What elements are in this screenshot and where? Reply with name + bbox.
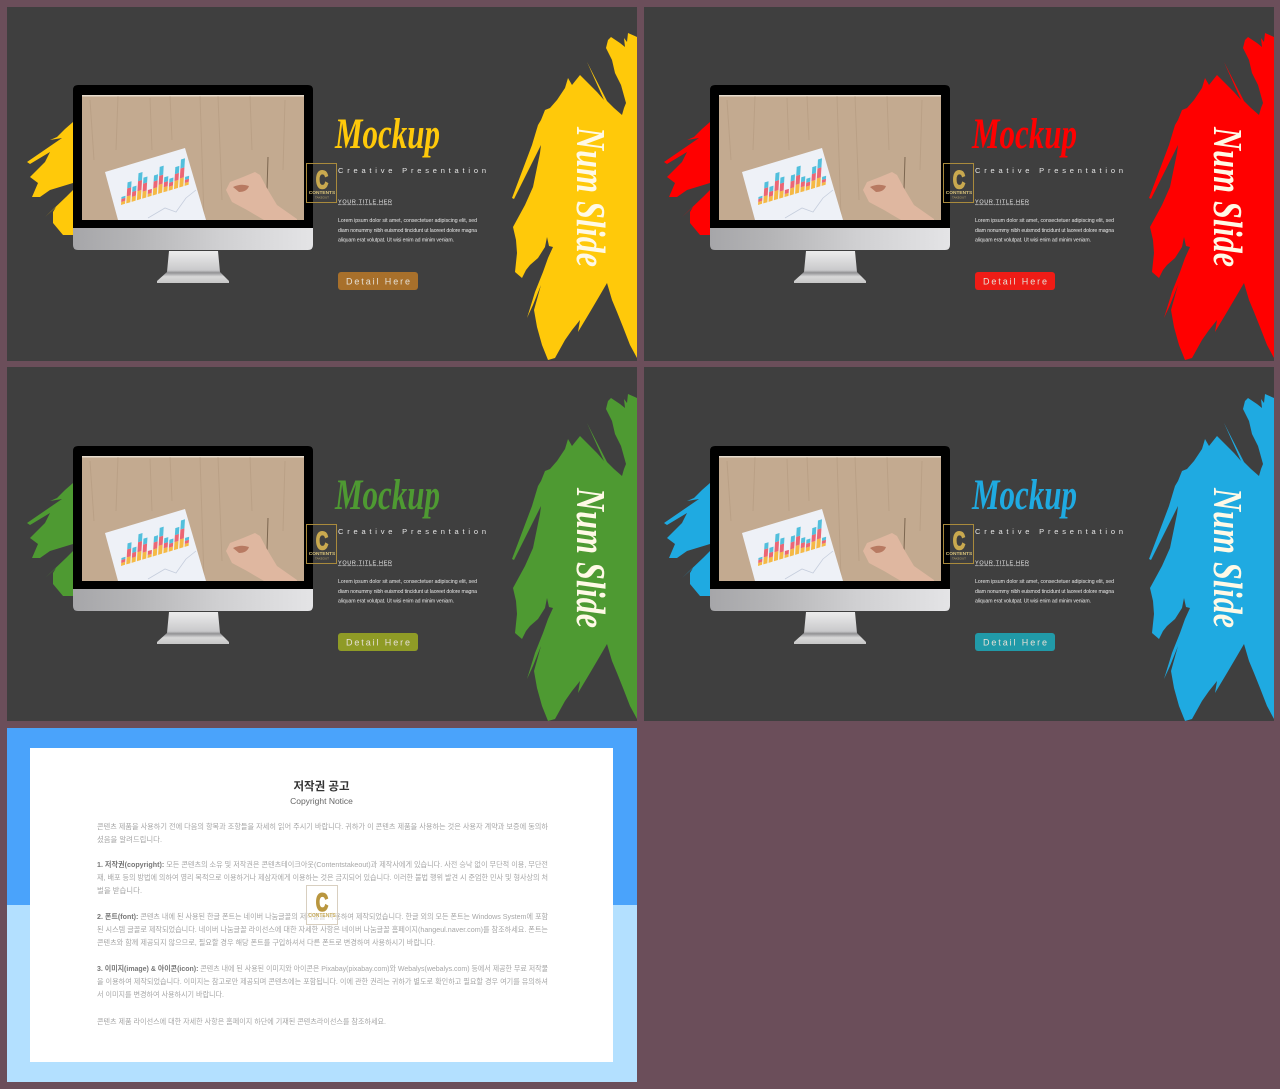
logo stamp: C xyxy=(953,527,965,555)
brush right xyxy=(512,33,637,360)
button: detail here: Detail Here xyxy=(346,638,410,648)
section 1: copyright: 벌을 받습니다. xyxy=(97,886,142,895)
background bottom band xyxy=(7,905,637,1082)
section 3: image and icon: 을 이용하여 제작되었습니다. 이미지는 참고로만 제공되며 콘텐츠에는 포함됩니다. 이에 관한 권리는 귀하가 별도로 확인하고 필요할 경우 여기를 유의하셔 xyxy=(97,977,548,986)
brush left xyxy=(27,483,73,596)
body text: diam nonummy nibh euismod tincidunt ut laoreet dolore magna xyxy=(975,589,1114,595)
vertical label: Num Slide: Num Slide xyxy=(1205,126,1251,267)
body text xyxy=(975,579,1114,604)
intro paragraph xyxy=(97,822,548,844)
logo stamp xyxy=(944,524,974,564)
heading: Mockup: Mockup xyxy=(334,472,440,519)
monitor mockup xyxy=(710,85,950,283)
intro paragraph: 셨음을 알려드립니다. xyxy=(97,835,162,844)
section 1: copyright: 재, 배포 등의 방법에 의하여 영리 목적으로 이용하거나 제삼자에게 이용하는 것은 금지되어 있습니다. 이러한 불법 행위 발견 시 준엄한 민사 및 형사상의 처 xyxy=(97,873,548,882)
heading: Mockup: Mockup xyxy=(334,111,440,158)
slide background xyxy=(644,367,1274,721)
button: detail here: Detail Here xyxy=(346,276,410,286)
logo stamp xyxy=(944,164,974,202)
logo stamp: TAKEOUT xyxy=(952,196,966,200)
brush right xyxy=(1149,33,1274,360)
body text: aliquam erat volutpat. Ut wisi enim ad minim veniam. xyxy=(338,238,454,244)
slide background xyxy=(7,367,637,721)
button: detail here: Detail Here xyxy=(983,276,1047,286)
body text: Lorem ipsum dolor sit amet, consectetuer adipiscing elit, sed xyxy=(338,579,477,585)
section 3: image and icon: 3. 이미지(image) & 아이콘(icon): 콘텐츠 내에 된 사용된 이미지와 아이콘은 Pixabay(pixabay.com)와 Webalys(webalys.com) 등에서 제공한 무료 저작물 xyxy=(97,964,548,973)
button: detail here xyxy=(975,272,1055,290)
heading: Mockup: Mockup xyxy=(971,111,1077,158)
section 1: copyright: 1. 저작권(copyright): 모든 콘텐츠의 소유 및 저작권은 콘텐츠테이크아웃(Contentstakeout)과 제작사에게 있습니다. 사전 승낙 없이 무단적 이용, 무단전 xyxy=(97,860,548,869)
your title: YOUR TITLE HER xyxy=(338,560,392,566)
body text xyxy=(975,218,1114,244)
monitor mockup xyxy=(73,85,313,283)
subtitle: Creative Presentation xyxy=(338,166,486,175)
your title: YOUR TITLE HER xyxy=(338,200,392,206)
logo stamp xyxy=(306,886,338,924)
panel: blue slide xyxy=(644,367,1274,721)
background top band xyxy=(7,728,637,905)
button: detail here xyxy=(338,272,418,290)
body text: diam nonummy nibh euismod tincidunt ut laoreet dolore magna xyxy=(975,228,1114,234)
logo stamp: CONTENTS xyxy=(946,190,973,196)
logo stamp: C xyxy=(316,166,328,194)
brush left xyxy=(27,122,73,235)
body text: Lorem ipsum dolor sit amet, consectetuer adipiscing elit, sed xyxy=(975,218,1114,224)
section 3: image and icon: 서 이미지를 변경하여 사용하시기 바랍니다. xyxy=(97,990,224,999)
monitor mockup xyxy=(710,446,950,644)
section 2: font: 2. 폰트(font): 콘텐츠 내에 된 사용된 한글 폰트는 네이버 나눔글꼴의 저작물을 사용하여 제작되었습니다. 한글 외의 모든 폰트는 Windows System에 포함 xyxy=(97,912,548,921)
button: detail here xyxy=(338,633,418,651)
body text: aliquam erat volutpat. Ut wisi enim ad minim veniam. xyxy=(975,598,1091,604)
panel: yellow slide xyxy=(7,7,637,361)
panel: copyright notice xyxy=(7,728,637,1082)
body text: Lorem ipsum dolor sit amet, consectetuer adipiscing elit, sed xyxy=(338,218,477,224)
button: detail here: Detail Here xyxy=(983,638,1047,648)
logo stamp: TAKEOUT xyxy=(315,196,329,200)
section 2: font xyxy=(97,912,548,947)
body text xyxy=(338,218,477,244)
logo stamp: C xyxy=(316,527,328,555)
brush right xyxy=(512,394,637,721)
section 3: image and icon xyxy=(97,964,548,999)
logo stamp: C xyxy=(953,166,965,194)
body text: diam nonummy nibh euismod tincidunt ut laoreet dolore magna xyxy=(338,228,477,234)
body text: aliquam erat volutpat. Ut wisi enim ad minim veniam. xyxy=(975,238,1091,244)
logo stamp xyxy=(306,524,336,564)
logo stamp: TAKEOUT xyxy=(952,556,966,560)
section 2: font: 콘텐츠와 함께 제공되지 않으므로, 필요할 경우 해당 폰트를 구입하셔서 다른 폰트로 변경하여 사용하시기 바랍니다. xyxy=(97,938,435,947)
slide background xyxy=(7,7,637,361)
subtitle: Creative Presentation xyxy=(338,527,486,536)
closing line: 콘텐츠 제품 라이선스에 대한 자세한 사항은 홈페이지 하단에 기재된 콘텐츠라이선스를 참조하세요. xyxy=(97,1017,386,1026)
body text: aliquam erat volutpat. Ut wisi enim ad minim veniam. xyxy=(338,598,454,604)
section 1: copyright xyxy=(97,860,548,895)
heading: Mockup: Mockup xyxy=(971,472,1077,519)
logo stamp xyxy=(306,164,336,202)
brush left xyxy=(664,483,710,596)
vertical label: Num Slide: Num Slide xyxy=(568,487,614,628)
panel: green slide xyxy=(7,367,637,721)
logo stamp: TAKEOUT xyxy=(315,556,329,560)
section 2: font: 된 시스템 글꼴로 제작되었습니다. 네이버 나눔글꼴 라이선스에 대한 자세한 사항은 네이버 나눔글꼴 홈페이지(hangeul.naver.com)를 참조하세요. 폰트는 xyxy=(97,925,548,934)
body text: diam nonummy nibh euismod tincidunt ut laoreet dolore magna xyxy=(338,589,477,595)
white notice card xyxy=(30,748,613,1062)
logo stamp: CONTENTS xyxy=(309,190,336,196)
notice subtitle: Copyright Notice xyxy=(290,796,353,806)
vertical label: Num Slide: Num Slide xyxy=(568,126,614,267)
logo stamp: CONTENTS xyxy=(308,913,336,919)
panel: red slide xyxy=(644,7,1274,361)
logo stamp: CONTENTS xyxy=(946,551,973,557)
subtitle: Creative Presentation xyxy=(975,166,1123,175)
vertical label: Num Slide: Num Slide xyxy=(1205,487,1251,628)
logo stamp: C xyxy=(316,889,328,917)
slide background xyxy=(644,7,1274,361)
body text: Lorem ipsum dolor sit amet, consectetuer adipiscing elit, sed xyxy=(975,579,1114,585)
logo stamp: CONTENTS xyxy=(309,551,336,557)
brush right xyxy=(1149,394,1274,721)
brush left xyxy=(664,122,710,235)
intro paragraph: 콘텐츠 제품을 사용하기 전에 다음의 항목과 조항들을 자세히 읽어 주시기 바랍니다. 귀하가 이 콘텐츠 제품을 사용하는 것은 사용자 계약과 보증에 동의하 xyxy=(97,822,548,831)
your title: YOUR TITLE HER xyxy=(975,560,1029,566)
notice title: 저작권 공고 xyxy=(293,779,350,793)
your title: YOUR TITLE HER xyxy=(975,200,1029,206)
button: detail here xyxy=(975,633,1055,651)
body text xyxy=(338,579,477,604)
subtitle: Creative Presentation xyxy=(975,527,1123,536)
monitor mockup xyxy=(73,446,313,644)
